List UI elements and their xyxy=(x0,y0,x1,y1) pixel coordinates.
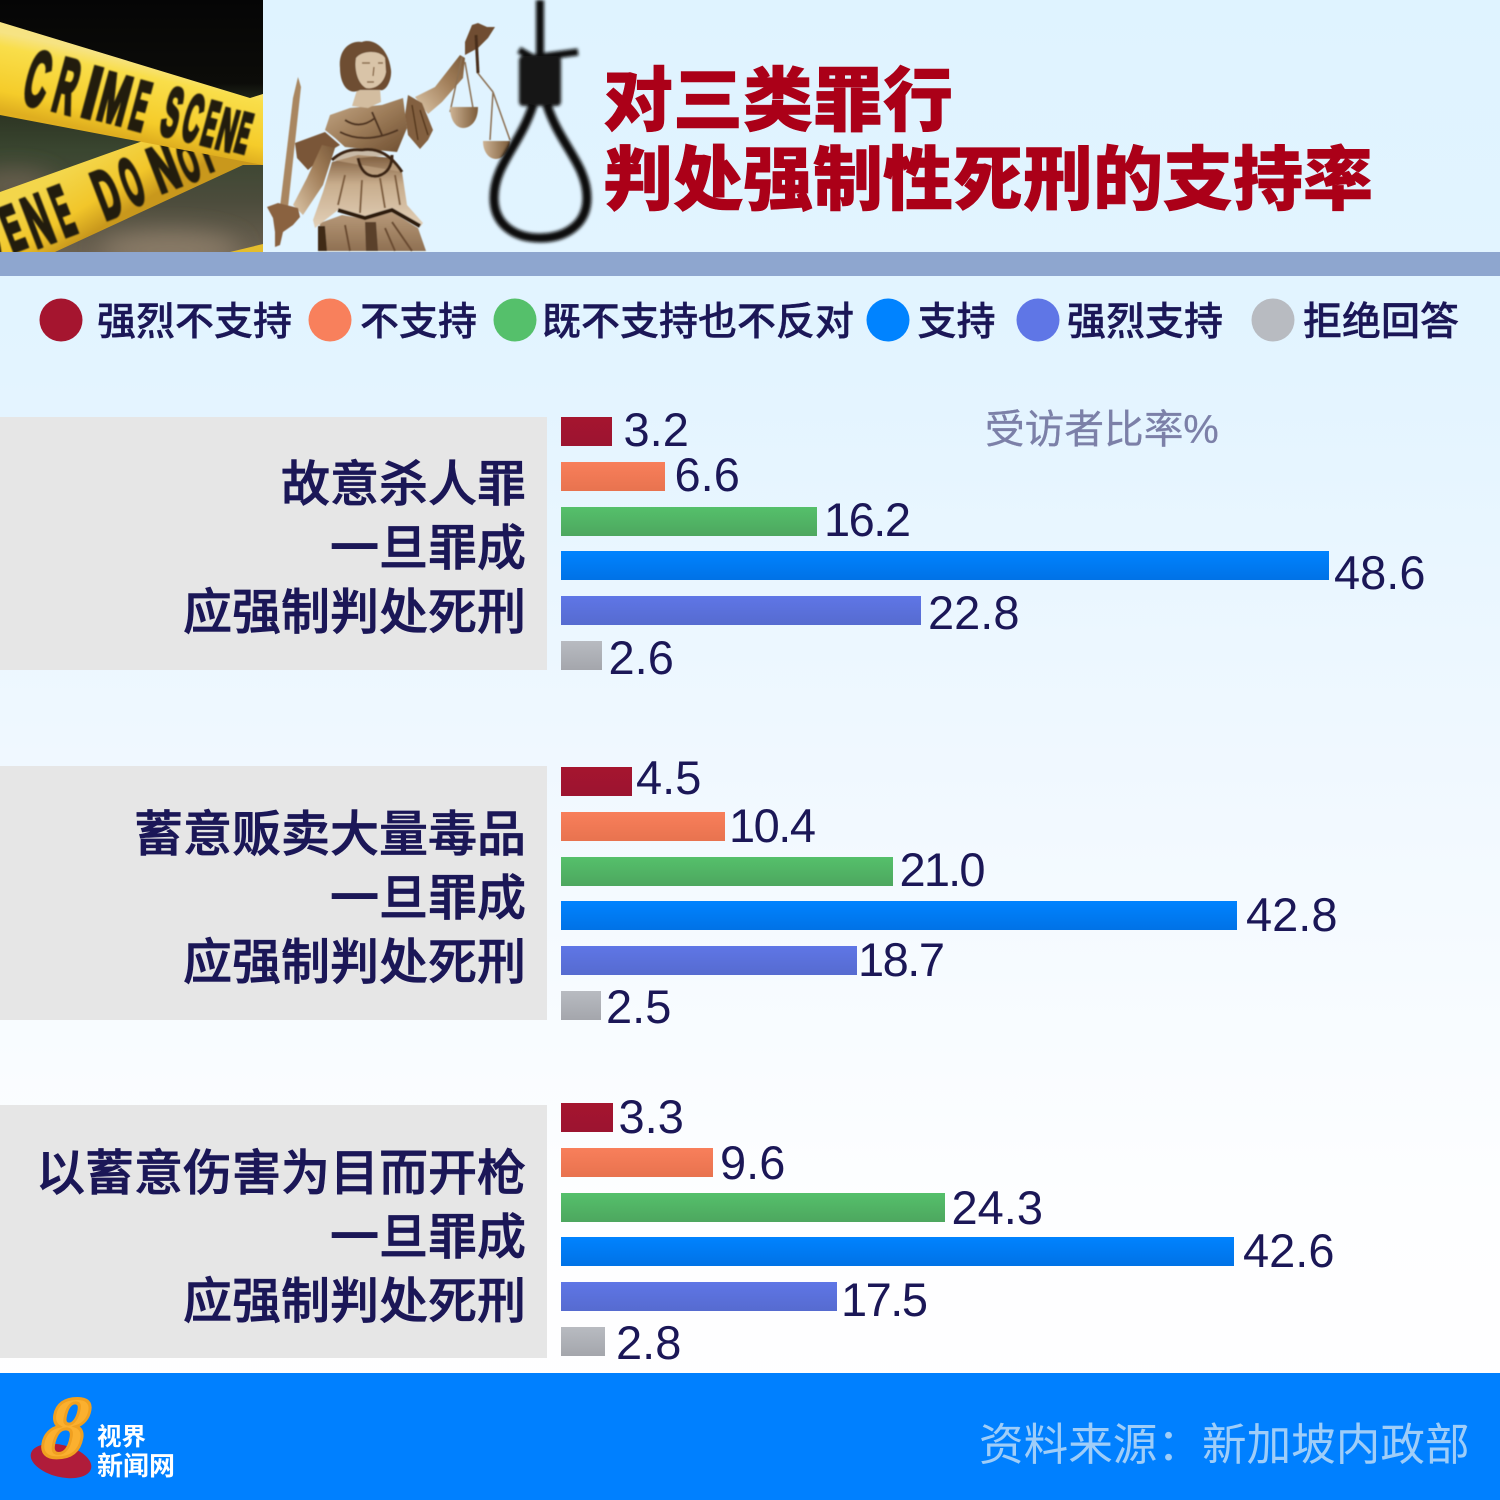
bar chart: firearms: 9.6 xyxy=(720,1136,785,1189)
bar chart: drugs xyxy=(561,751,1337,1033)
photo: crime scene tape: S xyxy=(154,74,190,153)
bar chart: firearms: 17.5 xyxy=(841,1273,928,1326)
legend: 拒绝回答 xyxy=(1303,301,1459,344)
face xyxy=(355,52,386,88)
sleeve xyxy=(405,95,433,149)
panel: drugs xyxy=(0,766,547,1020)
legend: 强烈不支持 xyxy=(97,301,292,344)
photo: crime scene tape: M xyxy=(91,58,139,140)
photo: crime scene tape: E xyxy=(123,66,158,145)
scales xyxy=(450,35,510,159)
legend: 强烈支持 xyxy=(1067,301,1223,344)
footer bar xyxy=(0,1373,1500,1500)
photo: crime scene tape xyxy=(0,0,263,277)
photo: crime scene tape: C xyxy=(175,80,211,157)
photo: crime scene tape: N xyxy=(12,178,63,262)
logo: 8 xyxy=(36,1380,97,1477)
photo: crime scene tape: O xyxy=(109,143,154,221)
bar chart: drugs: 18.7 xyxy=(858,933,945,986)
source: 资料来源：新加坡内政部 xyxy=(979,1421,1470,1470)
logo: 新闻网 xyxy=(97,1451,175,1481)
logo xyxy=(27,1380,175,1484)
panel: firearms: 一旦罪成 xyxy=(330,1211,526,1265)
photo: crime scene tape: I xyxy=(75,52,110,134)
panel: murder: 一旦罪成 xyxy=(330,522,526,576)
panel: murder xyxy=(0,417,547,670)
bar chart: murder xyxy=(561,403,1425,684)
bar chart: murder: 16.2 xyxy=(824,493,911,546)
torso xyxy=(325,98,407,152)
belt ornament xyxy=(332,149,402,176)
legend: 既不支持也不反对 xyxy=(542,301,854,344)
raised hand xyxy=(465,23,495,55)
bar chart: murder: 48.6 xyxy=(1334,546,1425,599)
bar chart: drugs: 21.0 xyxy=(900,843,986,896)
bar chart: firearms: 3.3 xyxy=(618,1090,684,1143)
raised arm xyxy=(415,55,465,114)
skirt xyxy=(313,155,423,228)
photo: crime scene tape: D xyxy=(83,155,131,234)
photo: crime scene tape: N xyxy=(139,130,189,206)
photo: crime scene tape: E xyxy=(196,88,226,159)
title xyxy=(603,62,1373,219)
legend: 不支持 xyxy=(360,301,477,344)
sword hand xyxy=(267,203,300,247)
panel: murder: 应强制判处死刑 xyxy=(183,586,526,640)
panel: firearms xyxy=(0,1105,547,1358)
legend xyxy=(40,298,1459,344)
statue of justice xyxy=(267,23,510,251)
lower arm xyxy=(293,145,335,215)
bar chart: murder: 2.6 xyxy=(608,631,674,684)
bar chart: firearms: 42.6 xyxy=(1243,1224,1334,1277)
bar chart: murder: 22.8 xyxy=(928,586,1019,639)
bar chart: firearms: 24.3 xyxy=(952,1181,1043,1234)
photo: crime scene tape: C xyxy=(16,34,60,124)
legend: 支持 xyxy=(918,301,996,344)
bar chart: firearms xyxy=(561,1090,1334,1369)
photo: crime scene tape: O xyxy=(169,130,208,195)
photo: crime scene tape: T xyxy=(187,122,223,184)
bar chart: drugs: 42.8 xyxy=(1246,888,1337,941)
photo: crime scene tape: E xyxy=(230,101,258,165)
bar chart: firearms: 2.8 xyxy=(616,1316,681,1369)
panel: drugs: 蓄意贩卖大量毒品 xyxy=(134,808,526,862)
panel: drugs: 应强制判处死刑 xyxy=(183,936,526,990)
icon: noose xyxy=(494,0,587,238)
cape xyxy=(295,132,340,170)
photo: crime scene tape: R xyxy=(46,43,88,131)
lower robe xyxy=(318,212,426,251)
title: 对三类罪行 xyxy=(603,62,953,140)
hair xyxy=(340,41,391,92)
bar chart: drugs: 2.5 xyxy=(606,980,671,1033)
neck xyxy=(352,88,381,108)
band xyxy=(0,252,1500,276)
bar chart: drugs: 10.4 xyxy=(729,799,816,852)
logo: 视界 xyxy=(97,1423,146,1451)
title: 判处强制性死刑的支持率 xyxy=(603,141,1373,219)
bar chart: murder: 3.2 xyxy=(624,403,689,456)
panel: drugs: 一旦罪成 xyxy=(330,872,526,926)
photo: crime scene tape: N xyxy=(211,98,244,164)
bar chart: murder: 6.6 xyxy=(674,448,740,501)
axis caption: 受访者比率% xyxy=(985,408,1219,452)
sword xyxy=(280,77,301,207)
photo: crime scene tape: E xyxy=(41,171,85,252)
panel: murder: 故意杀人罪 xyxy=(281,458,526,512)
panel: firearms: 应强制判处死刑 xyxy=(183,1275,526,1329)
panel: firearms: 以蓄意伤害为目而开枪 xyxy=(36,1147,526,1201)
bar chart: drugs: 4.5 xyxy=(636,751,701,804)
